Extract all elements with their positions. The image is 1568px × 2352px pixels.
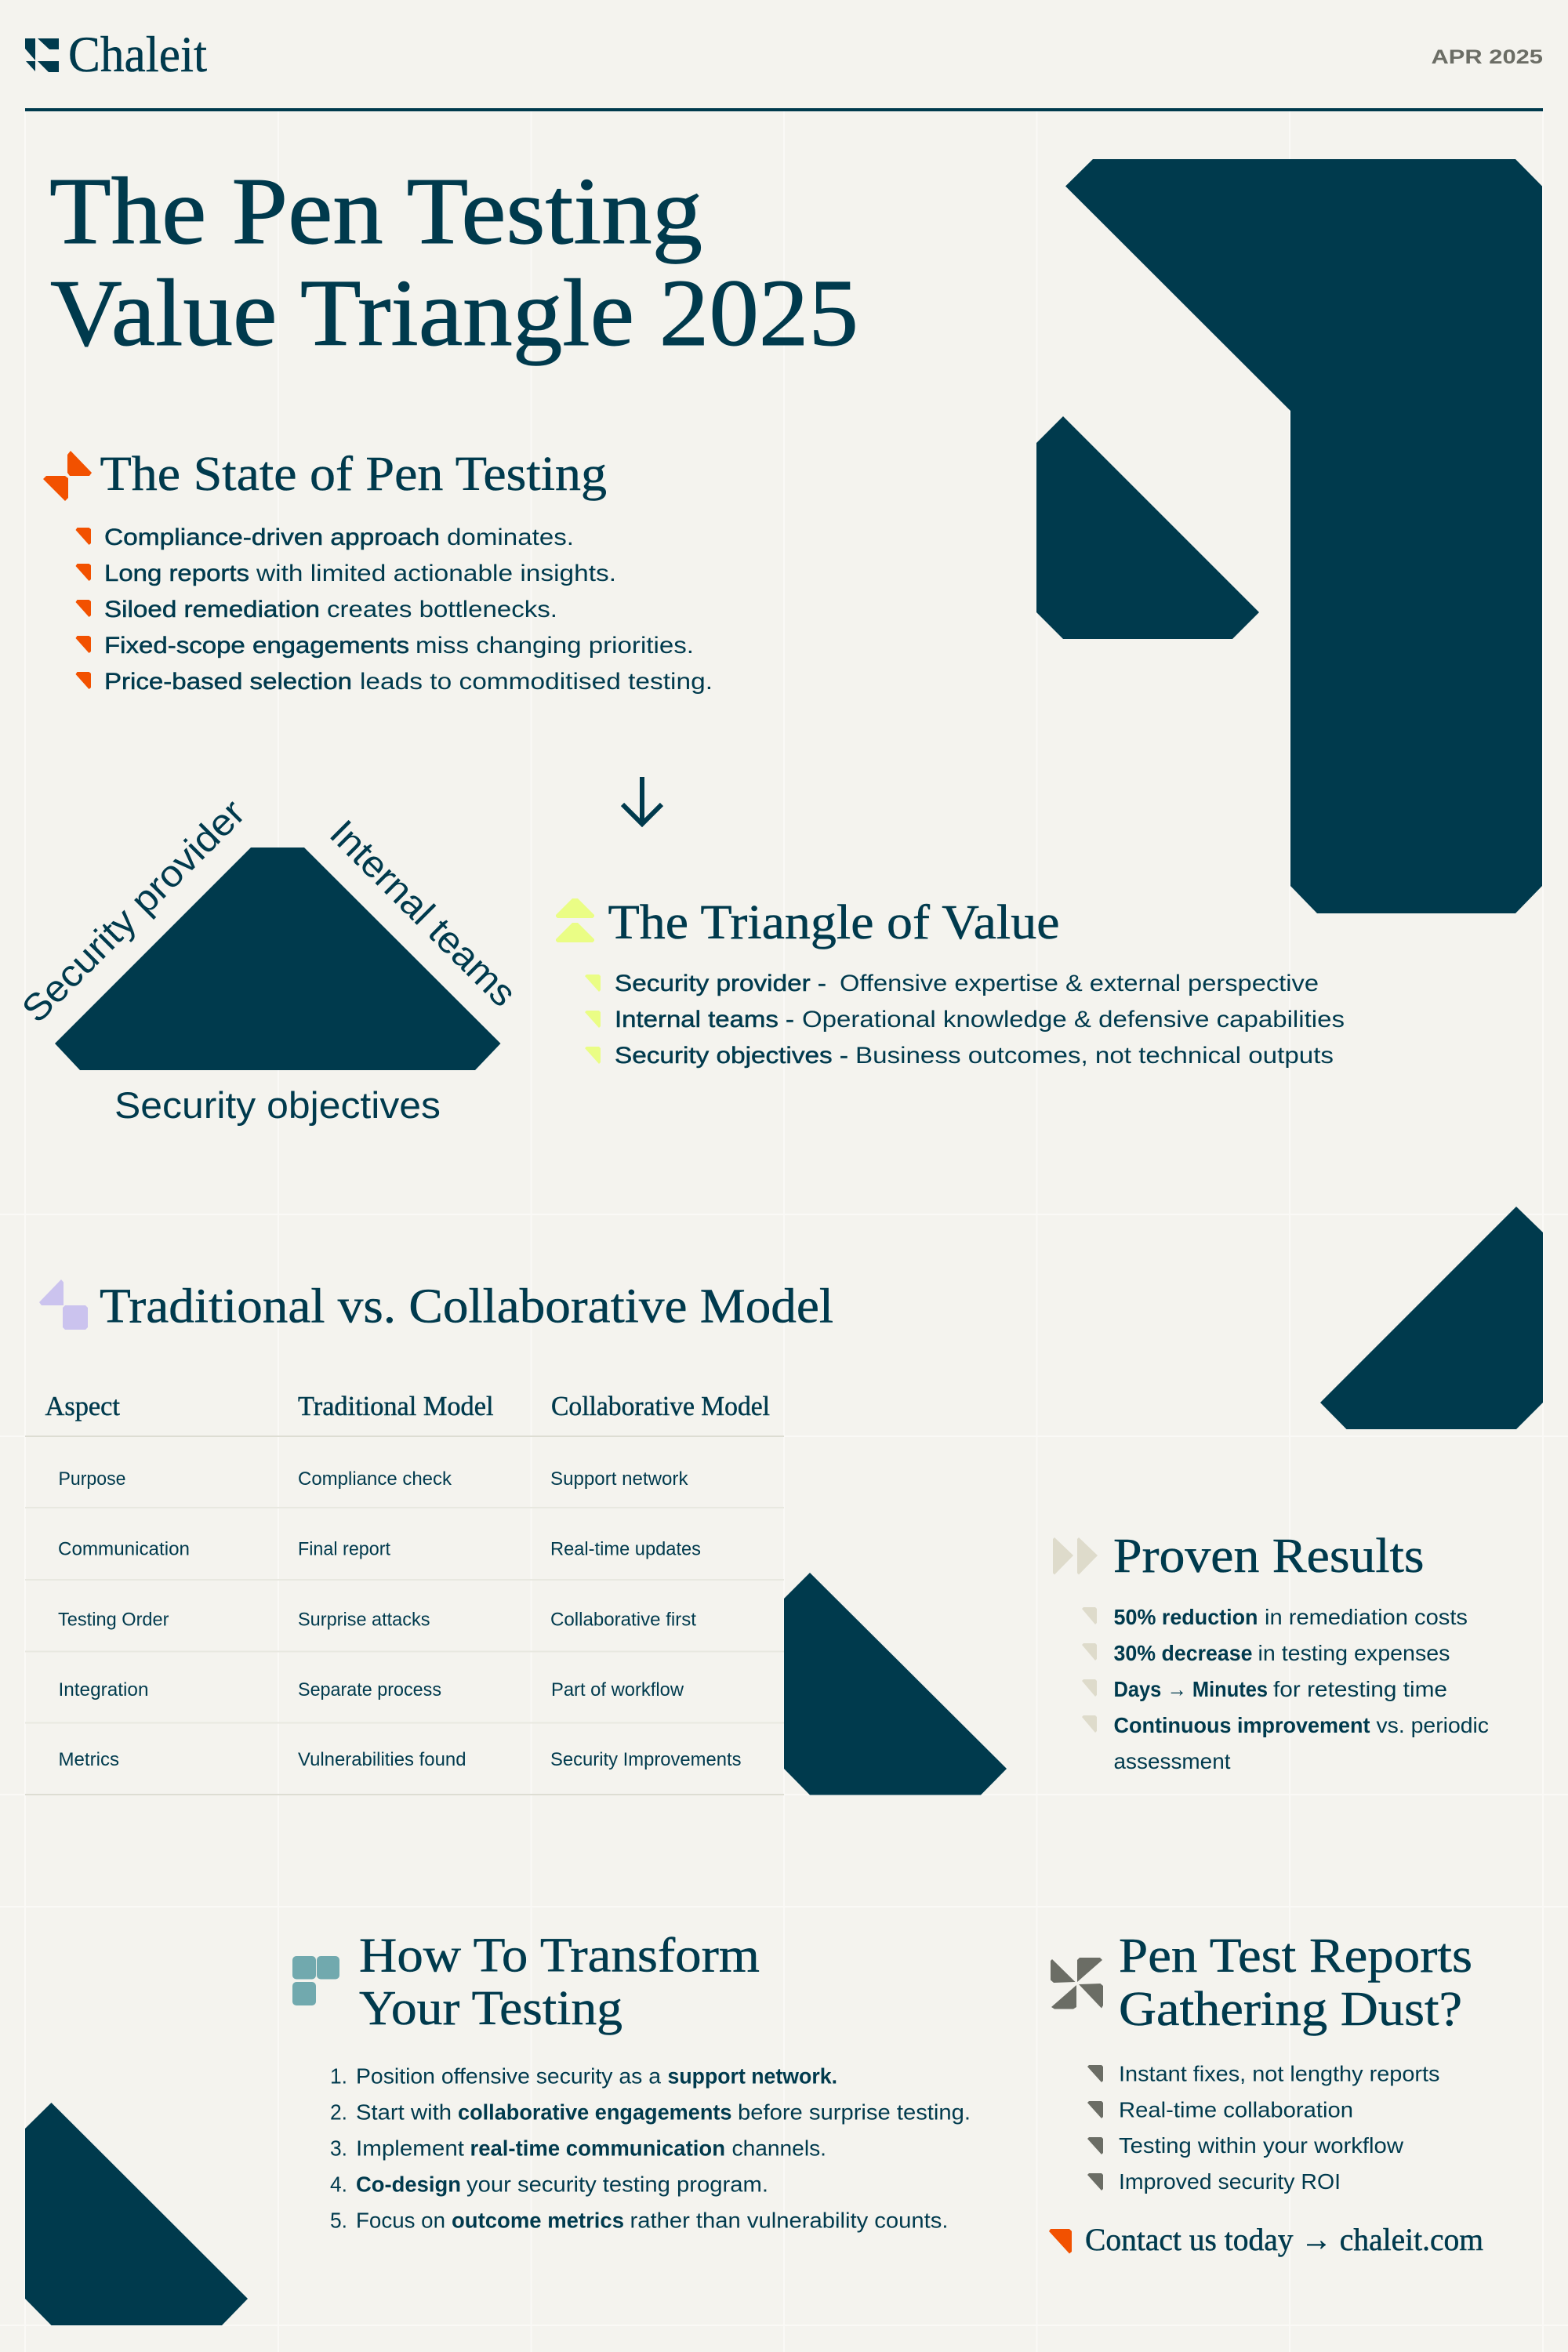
list item: Real-time collaboration	[1119, 2098, 1353, 2122]
list item: 30% decrease	[1113, 1641, 1253, 1665]
panel: the state of pen testing	[43, 448, 713, 695]
list item 3: 3.	[330, 2136, 347, 2161]
title: The Pen Testing	[49, 158, 702, 264]
list item	[1082, 1713, 1489, 1773]
list item 5: Focus on	[356, 2208, 445, 2233]
list item: Continuous improvement	[1113, 1713, 1370, 1737]
icon: lime stacked triangles	[556, 898, 594, 942]
list item	[1082, 1641, 1450, 1665]
panel: traditional vs collaborative model	[25, 1279, 833, 1795]
header	[25, 27, 1543, 111]
list item	[585, 971, 1319, 996]
decorative shape: comparison top-right block	[1320, 1207, 1543, 1429]
table row: testing order: Testing Order	[58, 1609, 169, 1631]
list item: Fixed-scope engagements	[104, 633, 409, 659]
list item	[585, 1007, 1345, 1033]
list item: Security provider -	[615, 971, 826, 996]
table row: communication: Real-time updates	[550, 1538, 701, 1560]
list item 4: your security testing program.	[466, 2172, 768, 2197]
icon: beige double chevrons	[1053, 1537, 1098, 1574]
table row: metrics: Vulnerabilities found	[298, 1749, 466, 1770]
decorative shape: comparison centre block	[784, 1573, 1007, 1795]
table row: testing order: Surprise attacks	[298, 1609, 430, 1631]
list item: Price-based selection	[104, 669, 352, 695]
list item 1: 1.	[330, 2063, 347, 2089]
table row: integration: Integration	[58, 1679, 149, 1700]
heading: Proven Results	[1113, 1530, 1424, 1583]
icon: lavender triangle and square	[39, 1279, 88, 1330]
list item	[1082, 1605, 1468, 1629]
list item: Offensive expertise & external perspective	[840, 971, 1319, 996]
list item 3: real-time communication	[470, 2136, 725, 2161]
icon: orange bow tie	[43, 451, 92, 501]
list item 2: 2.	[330, 2100, 347, 2125]
list item: Testing within your workflow	[1119, 2133, 1404, 2158]
table row: metrics	[58, 1749, 742, 1770]
table header: Collaborative Model	[551, 1391, 770, 1421]
panel: pen test reports gathering dust	[1049, 1929, 1483, 2257]
list item: with limited actionable insights.	[256, 561, 616, 586]
list item: vs. periodic	[1377, 1713, 1489, 1737]
label: security provider: Security provider	[14, 792, 253, 1031]
table row: testing order: Collaborative first	[550, 1609, 696, 1631]
table row: metrics: Security Improvements	[550, 1749, 742, 1770]
heading: Pen Test Reports	[1119, 1929, 1472, 1983]
label: security objectives: Security objectives	[114, 1084, 441, 1126]
list item: 50% reduction	[1113, 1605, 1258, 1629]
list item: Improved security ROI	[1119, 2169, 1341, 2194]
table header: Aspect	[45, 1391, 120, 1421]
list item 4: 4.	[330, 2172, 347, 2197]
arrow: down	[622, 777, 662, 824]
list item 3	[330, 2136, 826, 2161]
list item: Operational knowledge & defensive capabilities	[802, 1007, 1345, 1033]
list item 1	[330, 2063, 837, 2089]
list item 5: outcome metrics	[452, 2208, 624, 2233]
icon: Chaleit logo mark	[25, 38, 59, 72]
table	[25, 1391, 784, 1795]
list item 2: collaborative engagements	[458, 2100, 732, 2125]
list item 3: Implement	[356, 2136, 464, 2161]
list item 2	[330, 2100, 971, 2125]
header rule	[25, 108, 1543, 111]
list item 5: rather than vulnerability counts.	[630, 2208, 949, 2233]
date: APR 2025	[1432, 46, 1543, 68]
list item: Instant fixes, not lengthy reports	[1119, 2062, 1439, 2085]
list item: leads to commoditised testing.	[360, 669, 713, 695]
decorative shape: large top-right block	[1065, 159, 1542, 913]
table header	[45, 1391, 770, 1421]
heading	[1119, 1929, 1472, 2036]
heading: Gathering Dust?	[1119, 1983, 1462, 2036]
list item 5	[330, 2208, 949, 2233]
list item 4: Co-design	[356, 2172, 461, 2197]
table row: purpose: Support network	[550, 1468, 689, 1490]
list item: creates bottlenecks.	[327, 597, 557, 622]
list item	[75, 561, 616, 586]
table row: metrics: Metrics	[58, 1749, 119, 1770]
decorative shape: mid-right block	[1036, 416, 1259, 639]
list item	[1082, 1677, 1447, 1701]
title: Value Triangle 2025	[50, 260, 858, 366]
table row: purpose: Compliance check	[298, 1468, 452, 1490]
icon: orange marker	[1049, 2229, 1072, 2253]
list item 4	[330, 2172, 768, 2197]
heading: Your Testing	[359, 1982, 622, 2035]
list item: assessment	[1113, 1749, 1231, 1773]
label: internal teams: Internal teams	[321, 812, 524, 1014]
decorative shape: bottom-left block	[25, 2103, 248, 2325]
table row: integration	[58, 1679, 684, 1700]
heading: Traditional vs. Collaborative Model	[100, 1279, 833, 1333]
list item: in testing expenses	[1258, 1641, 1450, 1665]
list item	[75, 669, 713, 695]
list item: for retesting time	[1273, 1677, 1447, 1701]
table row: communication: Final report	[298, 1538, 390, 1560]
logo wordmark: Chaleit	[68, 27, 207, 83]
table row: purpose	[58, 1468, 689, 1490]
table row: communication	[58, 1538, 701, 1560]
list item: Days → Minutes	[1113, 1677, 1268, 1701]
icon: grey pinwheel	[1051, 1958, 1103, 2009]
heading: The Triangle of Value	[608, 896, 1060, 949]
table row: communication: Communication	[58, 1538, 190, 1560]
heading: How To Transform	[359, 1929, 760, 1982]
list item 3: channels.	[732, 2136, 826, 2161]
table row: integration: Part of workflow	[551, 1679, 684, 1700]
list item	[75, 524, 574, 550]
icon: teal squares	[292, 1956, 339, 2005]
list item 5: 5.	[330, 2208, 347, 2233]
panel: how to transform your testing	[292, 1929, 971, 2233]
list item 2: before surprise testing.	[738, 2100, 971, 2125]
list item: Siloed remediation	[104, 597, 320, 622]
table rules	[25, 1436, 784, 1795]
list item: dominates.	[447, 524, 574, 550]
heading: The State of Pen Testing	[100, 448, 607, 501]
table row: purpose: Purpose	[58, 1468, 125, 1490]
list item: miss changing priorities.	[416, 633, 694, 659]
list item 1: support network.	[668, 2063, 837, 2089]
list item	[75, 633, 694, 659]
table header: Traditional Model	[298, 1391, 494, 1421]
table row: testing order	[58, 1609, 696, 1631]
list item: Long reports	[104, 561, 249, 586]
panel: proven results	[1053, 1530, 1489, 1773]
call to action	[1049, 2222, 1483, 2257]
chart: value triangle	[14, 792, 524, 1126]
heading	[359, 1929, 760, 2035]
list item: Internal teams -	[615, 1007, 794, 1033]
list item	[585, 1043, 1334, 1069]
table row: integration: Separate process	[298, 1679, 441, 1700]
list item: Security objectives -	[615, 1043, 848, 1069]
list item 2: Start with	[356, 2100, 452, 2125]
list item 1: Position offensive security as a	[356, 2063, 661, 2089]
contact text: Contact us today → chaleit.com	[1085, 2222, 1483, 2257]
list item	[75, 597, 557, 622]
panel: the triangle of value	[556, 896, 1345, 1069]
list item: in remediation costs	[1265, 1605, 1468, 1629]
triangle shape	[55, 848, 500, 1070]
list item: Compliance-driven approach	[104, 524, 440, 550]
title	[49, 158, 858, 366]
list item: Business outcomes, not technical outputs	[855, 1043, 1334, 1069]
